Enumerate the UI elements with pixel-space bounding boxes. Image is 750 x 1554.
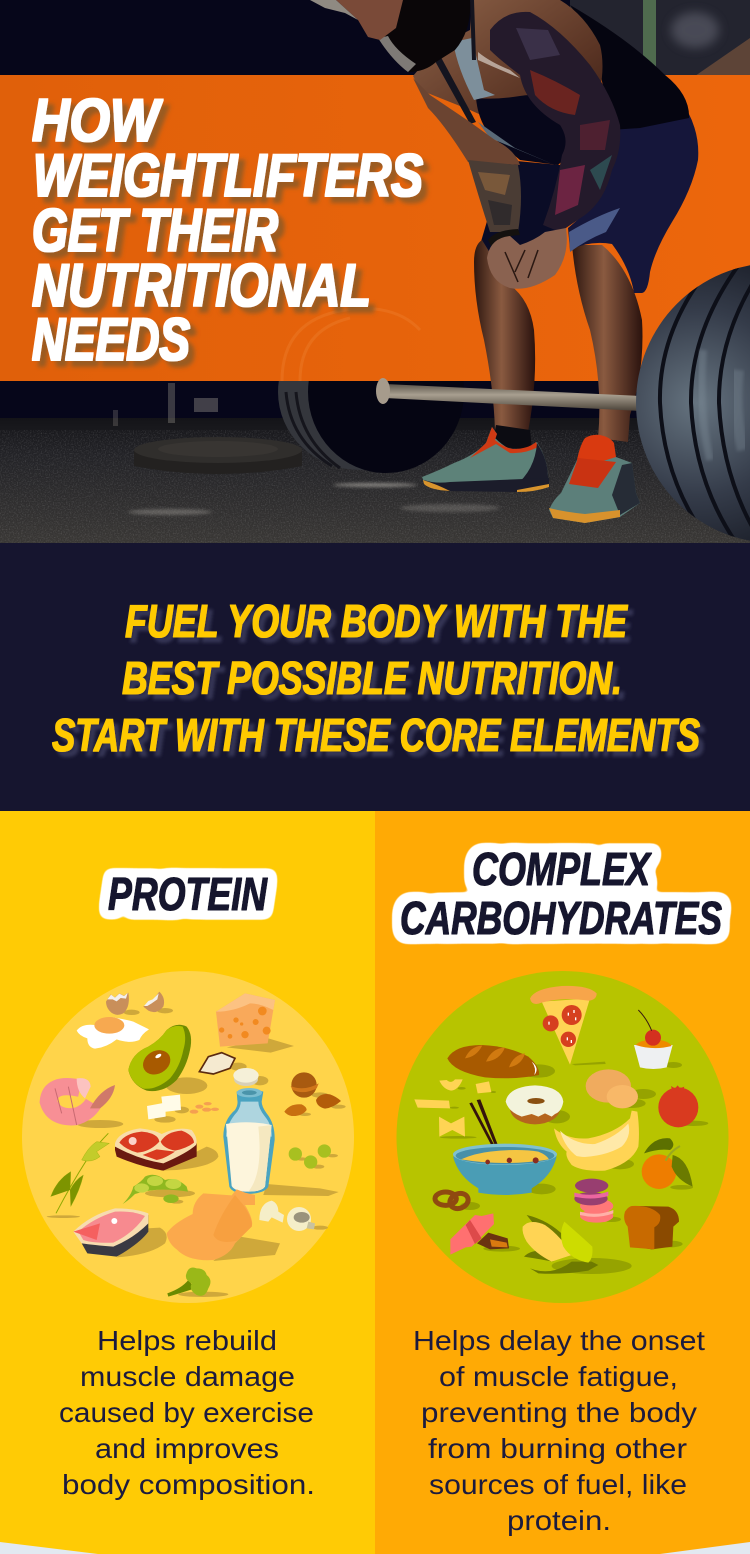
illustration: carbohydrate foods <box>414 986 708 1274</box>
near barbell plates <box>636 250 750 555</box>
right arm tattoo sleeve <box>490 12 620 232</box>
corn cob <box>522 1215 598 1274</box>
mushrooms <box>259 1201 315 1231</box>
fried egg <box>77 1017 149 1049</box>
gym floor <box>0 418 750 543</box>
green peas <box>289 1144 331 1169</box>
bread loaf <box>447 1045 539 1078</box>
pomegranate <box>658 1085 698 1127</box>
shorts <box>568 112 698 293</box>
cheese <box>216 993 275 1047</box>
text block: protein description: muscle damage <box>80 1361 295 1392</box>
broccoli <box>167 1267 210 1297</box>
donut <box>506 1085 563 1124</box>
left forearm tattoo <box>468 160 521 232</box>
walnut and almonds <box>284 1072 341 1116</box>
lentils <box>190 1102 219 1114</box>
coconut <box>199 1053 235 1074</box>
front leg <box>572 245 642 442</box>
egg shells <box>106 992 164 1015</box>
left arm <box>413 78 520 165</box>
back leg <box>474 240 535 432</box>
cupcake with cherry <box>634 1010 673 1069</box>
potatoes <box>586 1069 638 1108</box>
macarons <box>574 1179 613 1223</box>
title: HOW <box>32 87 163 154</box>
background equipment <box>113 383 218 426</box>
gym background top right <box>570 0 750 76</box>
shadows <box>47 1008 346 1297</box>
text block: protein description: caused by exercise <box>59 1397 314 1428</box>
subtitle heading: FUEL YOUR BODY WITH THE <box>125 595 628 647</box>
text block: complex carbohydrates description: of muscle fatigue, <box>439 1361 678 1392</box>
text block: complex carbohydrates description: preventing the body <box>421 1397 697 1428</box>
text block: protein description <box>59 1325 315 1500</box>
bracelet <box>488 229 520 248</box>
subtitle heading <box>52 595 700 761</box>
orange title band <box>0 75 750 381</box>
left shoe <box>422 427 549 492</box>
sliced bread <box>624 1206 679 1249</box>
candy and chocolate <box>450 1213 509 1255</box>
shadows <box>440 1062 708 1274</box>
faint plate ghost in band <box>282 309 420 381</box>
text block: complex carbohydrates description: from burning other <box>428 1433 687 1464</box>
tofu <box>147 1095 181 1119</box>
oat plant <box>51 1133 109 1213</box>
panel: navy subtitle band <box>0 543 750 811</box>
orange with leaves <box>642 1138 693 1189</box>
gap between arm and legs <box>481 161 560 251</box>
heading: complex carbohydrates <box>400 843 722 944</box>
circle: protein foods <box>22 971 354 1303</box>
pasta pieces <box>414 1079 491 1137</box>
title: GET THEIR <box>32 197 278 264</box>
milk bottle <box>223 1088 275 1194</box>
socks <box>495 425 532 448</box>
face <box>336 0 403 40</box>
text block: complex carbohydrates description: Helps delay the onset <box>413 1325 705 1356</box>
steak <box>115 1128 197 1171</box>
panel: protein column <box>0 811 375 1554</box>
torso and shoulder skin <box>413 0 602 114</box>
title: NEEDS <box>32 306 190 373</box>
noodle bowl <box>453 1099 557 1195</box>
circle: carbohydrate foods <box>396 971 728 1303</box>
tank front <box>476 95 566 165</box>
back tank <box>570 5 689 130</box>
loose weight plate on the floor <box>134 437 302 474</box>
pizza slice <box>530 986 597 1065</box>
title: WEIGHTLIFTERS <box>33 142 423 209</box>
avocado <box>128 1025 191 1091</box>
pea pod <box>123 1175 188 1204</box>
heading: protein: PROTEIN <box>108 868 268 920</box>
dried fruit rings <box>435 1191 470 1211</box>
tank strap <box>453 38 495 100</box>
hands <box>487 228 567 289</box>
weightlifter figure <box>310 0 698 450</box>
roast chicken <box>167 1189 255 1260</box>
hero photo: weightlifter at a barbell <box>0 0 750 555</box>
salmon steak <box>73 1208 148 1257</box>
shrimp <box>48 1078 115 1125</box>
subtitle heading: BEST POSSIBLE NUTRITION. <box>122 652 622 704</box>
heading: complex carbohydrates: COMPLEX <box>472 843 652 895</box>
text block: protein description: and improves <box>95 1433 279 1464</box>
text block: complex carbohydrates description: protein. <box>507 1505 611 1536</box>
text block: protein description: Helps rebuild <box>97 1325 277 1356</box>
white mushroom cap <box>233 1068 259 1086</box>
shoulder highlight <box>478 52 520 78</box>
barbell bar <box>376 378 640 411</box>
panel: complex carbohydrates column <box>375 811 750 1554</box>
hair strands <box>310 0 358 20</box>
text block: protein description: body composition. <box>62 1469 315 1500</box>
bottom chevron edge <box>0 1542 750 1554</box>
far barbell plates <box>278 381 464 473</box>
text block: complex carbohydrates description: sources of fuel, like <box>429 1469 687 1500</box>
title: NUTRITIONAL <box>32 252 371 319</box>
illustration: protein foods <box>47 992 346 1297</box>
title <box>32 87 423 373</box>
beard and hair <box>380 0 470 72</box>
text block: complex carbohydrates description <box>413 1325 705 1536</box>
bananas <box>554 1111 639 1171</box>
right shoe <box>549 435 640 523</box>
